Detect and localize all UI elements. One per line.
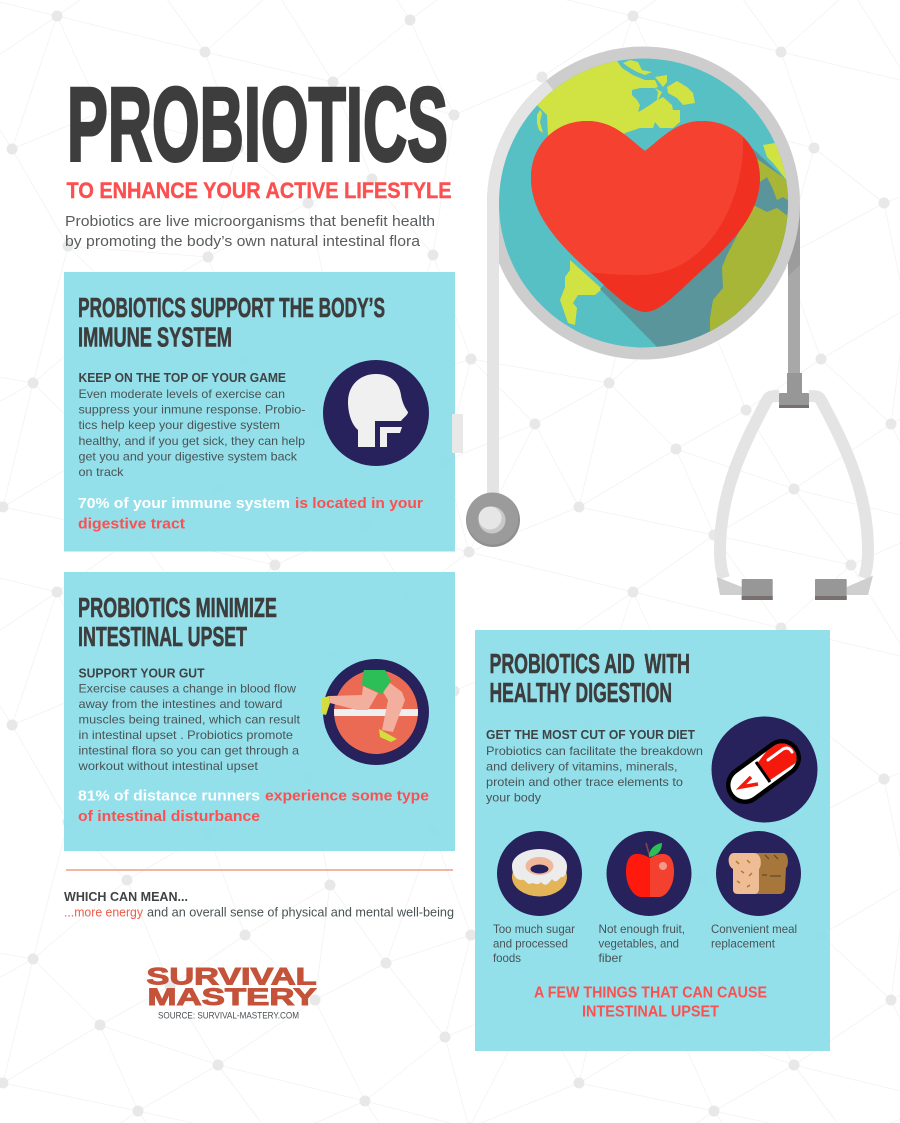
callout: causes of intestinal upset	[534, 984, 767, 1020]
intro text: by promoting the body’s own natural intestinal flora	[65, 233, 421, 250]
callout: causes of intestinal upset: INTESTINAL UPSET	[582, 1004, 719, 1020]
icon: runner	[322, 659, 429, 765]
caption: fruit	[598, 922, 685, 965]
caption: meal replacement	[711, 922, 797, 950]
heading: healthy digestion: PROBIOTICS AID WITH	[490, 648, 690, 679]
caption: sugar: foods	[493, 951, 521, 965]
text block: support your gut: workout without intestinal upset	[77, 759, 259, 773]
panel: healthy digestion	[475, 630, 830, 1051]
text block: get the most out of your diet: Probiotics can facilitate the breakdown	[486, 744, 703, 758]
stat: 70 percent	[78, 495, 423, 532]
stethoscope	[452, 203, 873, 600]
icon: donut	[497, 831, 582, 916]
panel: intestinal upset	[64, 572, 455, 851]
subtitle: TO ENHANCE YOUR ACTIVE LIFESTYLE	[66, 178, 452, 203]
land: europe in shadow	[757, 159, 788, 200]
text block: keep on the top of your game: KEEP ON THE TOP OF YOUR GAME	[78, 371, 286, 385]
intro text	[65, 213, 435, 250]
logo: survival mastery	[146, 964, 316, 1011]
text block: support your gut: intestinal flora so you can get through a	[78, 744, 299, 758]
text block: keep on the top of your game: tics help keep your digestive system	[78, 418, 280, 432]
text block: get the most out of your diet	[486, 728, 703, 804]
stat: 70 percent: is located in your	[295, 495, 423, 512]
land: north america	[537, 60, 695, 136]
icon: capsule	[712, 716, 818, 822]
caption: fruit: fiber	[598, 951, 623, 965]
text block: keep on the top of your game: on track	[78, 465, 125, 479]
heading: intestinal upset: PROBIOTICS MINIMIZE	[78, 592, 277, 623]
icon: head and throat	[323, 360, 429, 466]
title: PROBIOTICS	[67, 66, 448, 184]
heading: intestinal upset: INTESTINAL UPSET	[78, 621, 247, 652]
text block: which can mean: and an overall sense of physical and mental well-being	[147, 906, 454, 920]
text block: support your gut	[77, 666, 301, 773]
land: africa	[710, 206, 788, 332]
text block: keep on the top of your game: suppress your inmune response. Probio-	[78, 402, 306, 416]
text block: get the most out of your diet: your body	[486, 790, 541, 804]
heading: healthy digestion: HEALTHY DIGESTION	[490, 677, 672, 708]
logo: survival mastery: SURVIVAL	[146, 964, 316, 990]
logo: survival mastery: MASTERY	[148, 984, 316, 1011]
text block: support your gut: Exercise causes a change in blood flow	[78, 682, 296, 696]
text block: keep on the top of your game: get you and your digestive system back	[78, 450, 298, 464]
globe	[466, 46, 800, 547]
text block: keep on the top of your game	[78, 371, 306, 479]
stat: 81 percent: of intestinal disturbance	[78, 808, 260, 825]
text block: keep on the top of your game: healthy, and if you get sick, they can help	[78, 434, 305, 448]
text block: get the most out of your diet: protein and other trace elements to	[486, 775, 683, 789]
chest piece	[466, 492, 520, 547]
caption: sugar: and processed	[493, 936, 568, 950]
text block: support your gut: away from the intestines and toward	[78, 697, 282, 711]
stat: 70 percent: 70% of your immune system	[78, 495, 290, 512]
text block: get the most out of your diet: GET THE MOST CUT OF YOUR DIET	[486, 728, 695, 742]
icon: bread	[716, 831, 801, 916]
land: south america	[560, 260, 602, 325]
intro text: Probiotics are live microorganisms that benefit health	[65, 213, 435, 230]
text block: which can mean: WHICH CAN MEAN...	[64, 890, 188, 904]
ear tubes	[720, 396, 868, 578]
tube: right	[788, 203, 800, 373]
text block: support your gut: in intestinal upset . Probiotics promote	[78, 728, 293, 742]
source line: SOURCE: SURVIVAL-MASTERY.COM	[158, 1010, 299, 1022]
text block: which can mean	[64, 890, 454, 920]
stat: 81 percent	[78, 788, 429, 825]
text block: support your gut: muscles being trained, which can result	[78, 712, 301, 726]
heart shadow	[600, 143, 800, 350]
connector	[779, 373, 809, 408]
ear tip: left	[742, 579, 773, 600]
stat: 70 percent: digestive tract	[78, 516, 185, 532]
heading: immune system: IMMUNE SYSTEM	[78, 322, 232, 352]
ear tip: right	[815, 579, 847, 600]
stat: 81 percent: experience some type	[265, 788, 429, 804]
land: europe	[763, 143, 786, 180]
stat: 81 percent: 81% of distance runners	[78, 788, 260, 804]
text block: keep on the top of your game: Even moderate levels of exercise can	[78, 387, 285, 401]
icon: apple	[606, 831, 692, 916]
caption: fruit: vegetables, and	[598, 936, 679, 950]
heading: intestinal upset	[78, 592, 277, 652]
callout: causes of intestinal upset: A FEW THINGS THAT CAN CAUSE	[534, 984, 767, 1002]
text block: which can mean: ...more energy	[64, 906, 144, 920]
caption: sugar	[493, 922, 575, 965]
heading: healthy digestion	[490, 648, 690, 708]
caption: fruit: Not enough fruit,	[598, 922, 685, 936]
tube: left	[487, 203, 499, 495]
heading: immune system	[78, 292, 385, 352]
heading: immune system: PROBIOTICS SUPPORT THE BODY’S	[78, 292, 385, 323]
heart	[531, 121, 760, 312]
caption: meal replacement: replacement	[711, 936, 776, 950]
caption: meal replacement: Convenient meal	[711, 922, 797, 936]
text block: get the most out of your diet: and delivery of vitamins, minerals,	[486, 760, 678, 774]
text block: support your gut: SUPPORT YOUR GUT	[78, 666, 205, 680]
caption: sugar: Too much sugar	[493, 922, 575, 936]
panel: immune system	[64, 272, 455, 552]
